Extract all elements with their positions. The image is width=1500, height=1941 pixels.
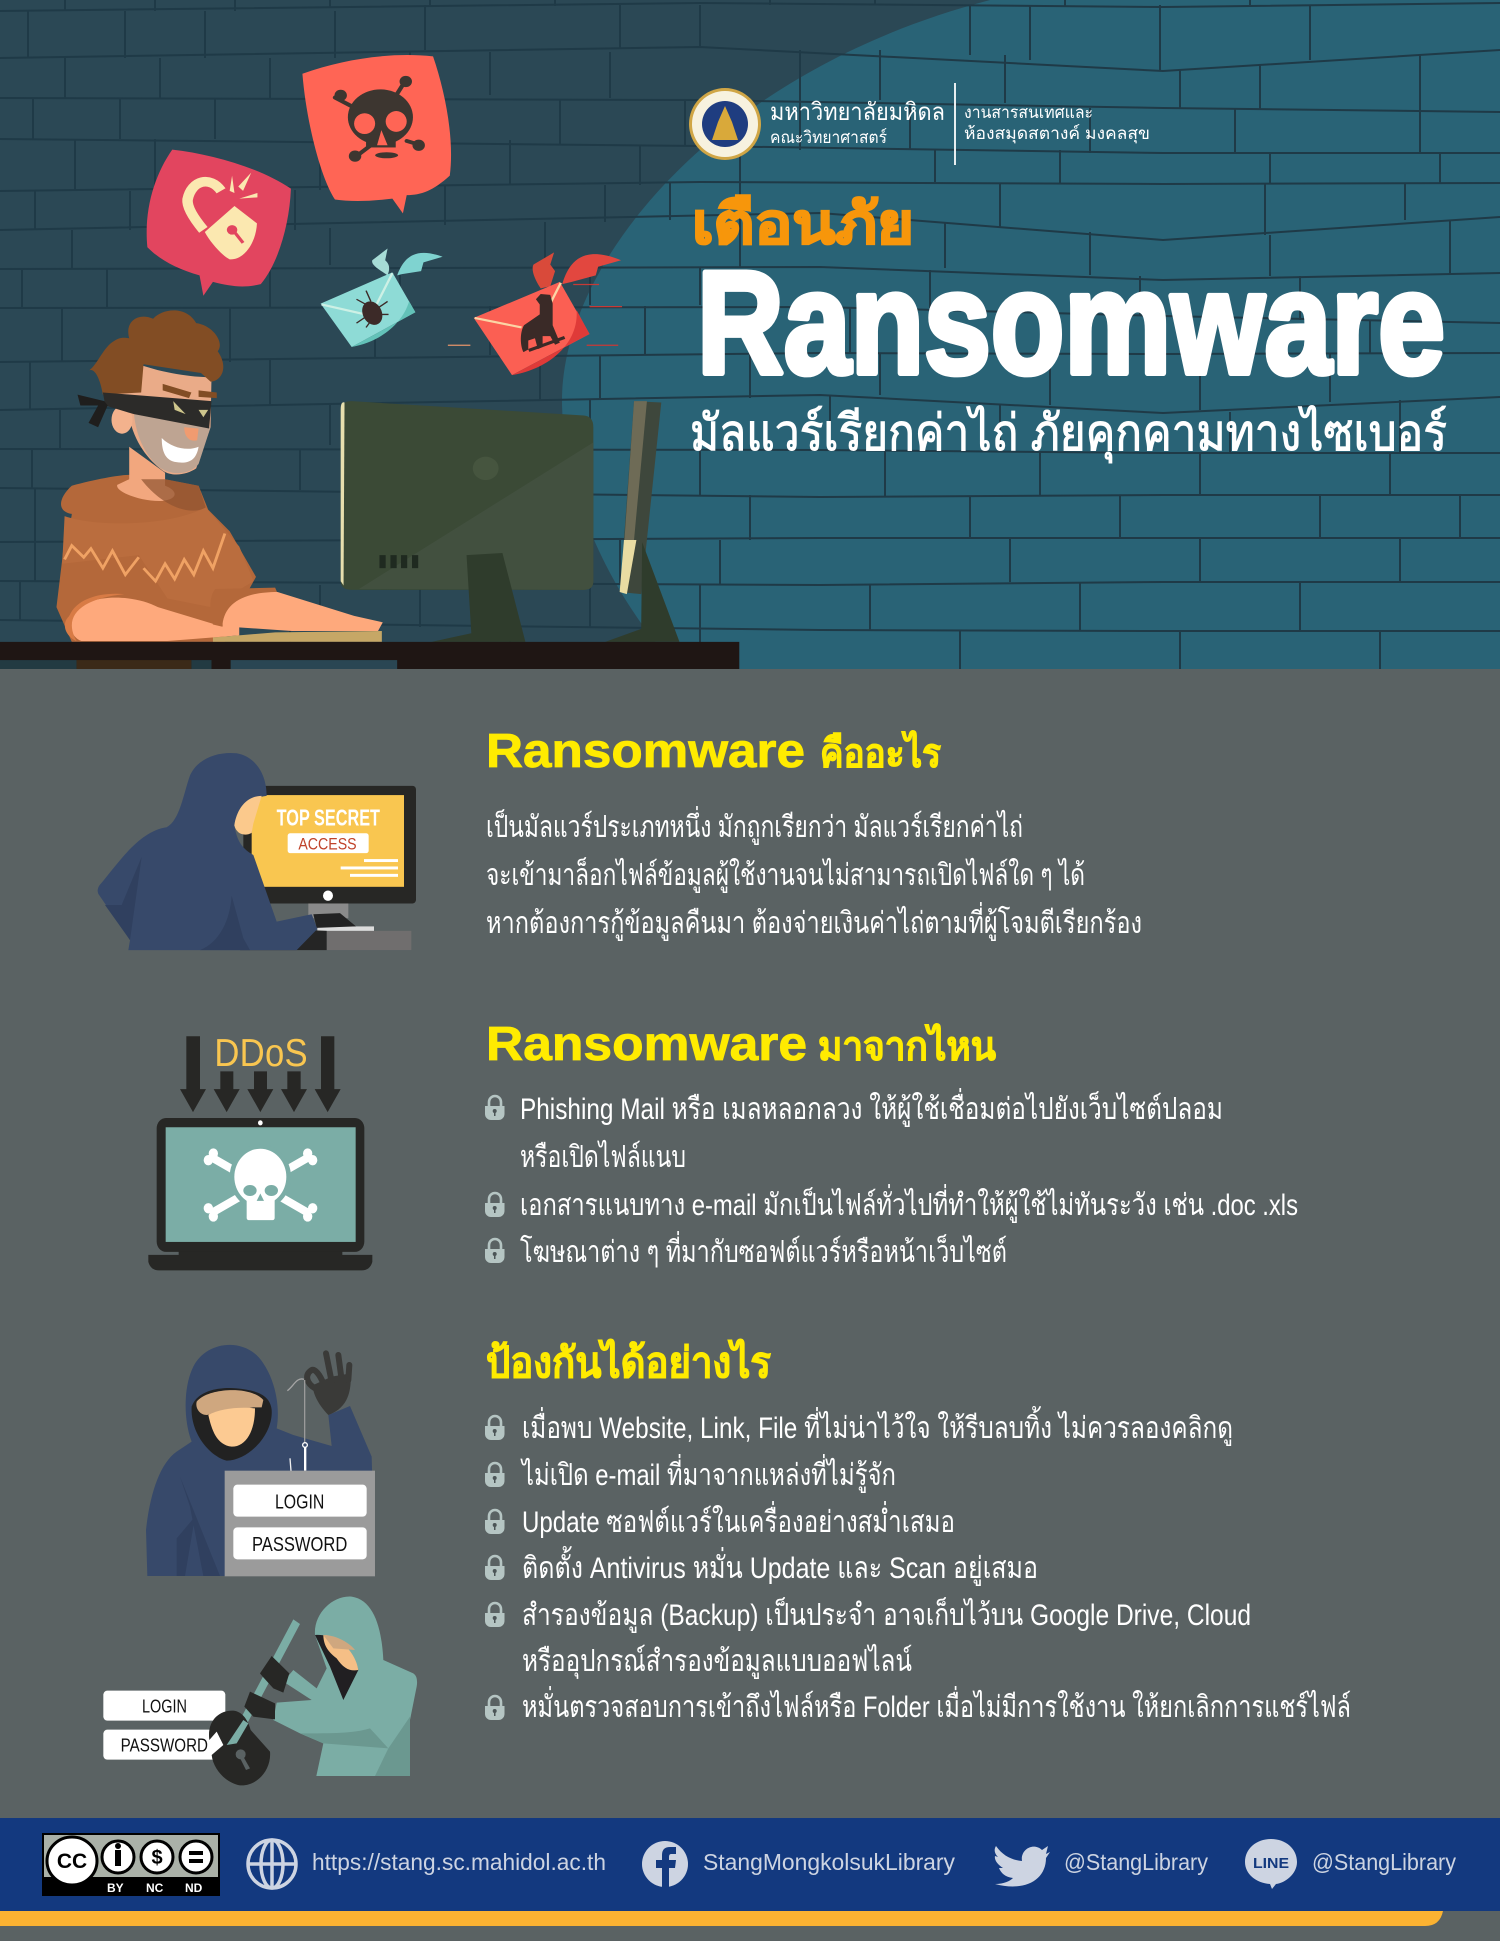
creative commons badge <box>42 1833 220 1896</box>
illustration: hacker at top secret computer: ACCESS <box>298 836 357 854</box>
heading: ป้องกันได้อย่างไร <box>486 1338 771 1386</box>
illustration: phishing hacker <box>146 1345 375 1576</box>
hacker person <box>56 310 383 642</box>
brick mortar lines <box>0 0 1500 669</box>
illustration: lock breaker hacker: LOGIN <box>142 1695 187 1716</box>
paragraph <box>486 806 1142 941</box>
bullet list <box>485 1406 1351 1724</box>
bullet list: Phishing Mail หรือ เมลหลอกลวง ให้ผู้ใช้เชื่อมต่อไปยังเว็บไซต์ปลอม <box>520 1088 1223 1127</box>
illustration: phishing hacker: PASSWORD <box>252 1534 347 1556</box>
creative commons badge: CC <box>57 1850 87 1873</box>
section: where Ransomware comes from <box>485 1018 1298 1269</box>
heading: Ransomware <box>486 725 805 778</box>
section: how to prevent <box>485 1338 1351 1724</box>
icon: twitter <box>995 1846 1050 1886</box>
title: warning: เตือนภัย <box>692 192 914 255</box>
heading: คืออะไร <box>820 730 941 776</box>
illustration: lock breaker hacker: PASSWORD <box>121 1734 208 1755</box>
paragraph: หากต้องการกู้ข้อมูลคืนมา ต้องจ่ายเงินค่าไถ่ตามที่ผู้โจมตีเรียกร้อง <box>486 902 1142 941</box>
bullet list: หรือเปิดไฟล์แนบ <box>520 1139 686 1174</box>
hacker illustration scene <box>0 55 739 669</box>
bullet list <box>485 1088 1298 1269</box>
arrows <box>180 1036 341 1112</box>
section: what is Ransomware <box>486 725 1142 941</box>
library name <box>964 103 1150 144</box>
keyboard <box>213 631 382 642</box>
illustration: hacker at top secret computer: TOP SECRET <box>277 804 380 831</box>
heading <box>486 725 941 778</box>
heading <box>486 1018 996 1071</box>
gloved hand <box>307 1353 351 1415</box>
illustration: lock breaker hacker <box>103 1597 417 1785</box>
bullet list: ติดตั้ง Antivirus หมั่น Update และ Scan อยู่เสมอ <box>522 1546 1038 1586</box>
icon: facebook <box>642 1841 688 1887</box>
creative commons badge: ND <box>185 1881 203 1895</box>
laptop <box>148 1118 372 1270</box>
desk <box>0 642 739 669</box>
paragraph: จะเข้ามาล็อกไฟล์ข้อมูลผู้ใช้งานจนไม่สามารถเปิดไฟล์ใด ๆ ได้ <box>486 856 1085 893</box>
university name: คณะวิทยาศาสตร์ <box>770 128 887 147</box>
icon: LINE <box>1245 1839 1297 1889</box>
illustration: DDoS laptop <box>148 1032 372 1270</box>
heading: มาจากไหน <box>818 1023 996 1069</box>
footer band <box>0 1818 1500 1911</box>
icon: LINE: LINE <box>1253 1855 1289 1872</box>
heading: Ransomware <box>486 1018 807 1071</box>
bullet list: หรืออุปกรณ์สำรองข้อมูลแบบออฟไลน์ <box>522 1643 912 1680</box>
second monitor side view <box>605 401 679 642</box>
logo divider <box>954 83 956 165</box>
icon: globe <box>248 1840 296 1888</box>
header background: brick wall <box>0 0 1500 669</box>
creative commons badge: $ <box>151 1847 163 1869</box>
bullet list: สำรองข้อมูล (Backup) เป็นประจำ อาจเก็บไว้บน Google Drive, Cloud <box>522 1596 1251 1633</box>
illustration: phishing hacker: LOGIN <box>275 1491 324 1513</box>
footer accent bar <box>0 1911 1443 1926</box>
bullet list: ไม่เปิด e-mail ที่มาจากแหล่งที่ไม่รู้จัก <box>520 1454 896 1493</box>
bullet list: เอกสารแนบทาง e-mail มักเป็นไฟล์ทั่วไปที่ทำให้ผู้ใช้ไม่ทันระวัง เช่น .doc .xls <box>520 1184 1298 1223</box>
bullet list: เมื่อพบ Website, Link, File ที่ไม่น่าไว้ใจ ให้รีบลบทิ้ง ไม่ควรลองคลิกดู <box>522 1406 1233 1446</box>
library name: ห้องสมุดสตางค์ มงคลสุข <box>964 124 1150 144</box>
line handle: @StangLibrary <box>1312 1849 1456 1875</box>
DDoS text: DDoS <box>214 1032 308 1075</box>
header lighter rounded spotlight <box>562 0 1500 669</box>
facebook name: StangMongkolsukLibrary <box>703 1849 955 1875</box>
library name: งานสารสนเทศและ <box>964 103 1093 122</box>
bullet list: Update ซอฟต์แวร์ในเครื่องอย่างสม่ำเสมอ <box>522 1501 955 1539</box>
university logo <box>689 88 761 160</box>
speech bubble: skull <box>302 55 451 213</box>
twitter handle: @StangLibrary <box>1064 1849 1208 1875</box>
creative commons badge: BY <box>107 1881 124 1895</box>
flying envelope: bug <box>321 249 443 347</box>
paragraph: เป็นมัลแวร์ประเภทหนึ่ง มักถูกเรียกว่า มัลแวร์เรียกค่าไถ่ <box>486 806 1023 845</box>
illustration: hacker at top secret computer <box>98 753 416 950</box>
speech bubble: broken lock <box>147 150 291 296</box>
university name: มหาวิทยาลัยมหิดล <box>770 99 945 126</box>
creative commons badge: NC <box>146 1881 164 1895</box>
website url: https://stang.sc.mahidol.ac.th <box>312 1849 606 1875</box>
bullet list: โฆษณาต่าง ๆ ที่มากับซอฟต์แวร์หรือหน้าเว็บไซต์ <box>520 1231 1007 1269</box>
flying envelope: trojan horse <box>448 252 622 375</box>
university name <box>770 99 945 147</box>
monitor back <box>341 401 593 642</box>
main body panel <box>0 669 1500 1818</box>
